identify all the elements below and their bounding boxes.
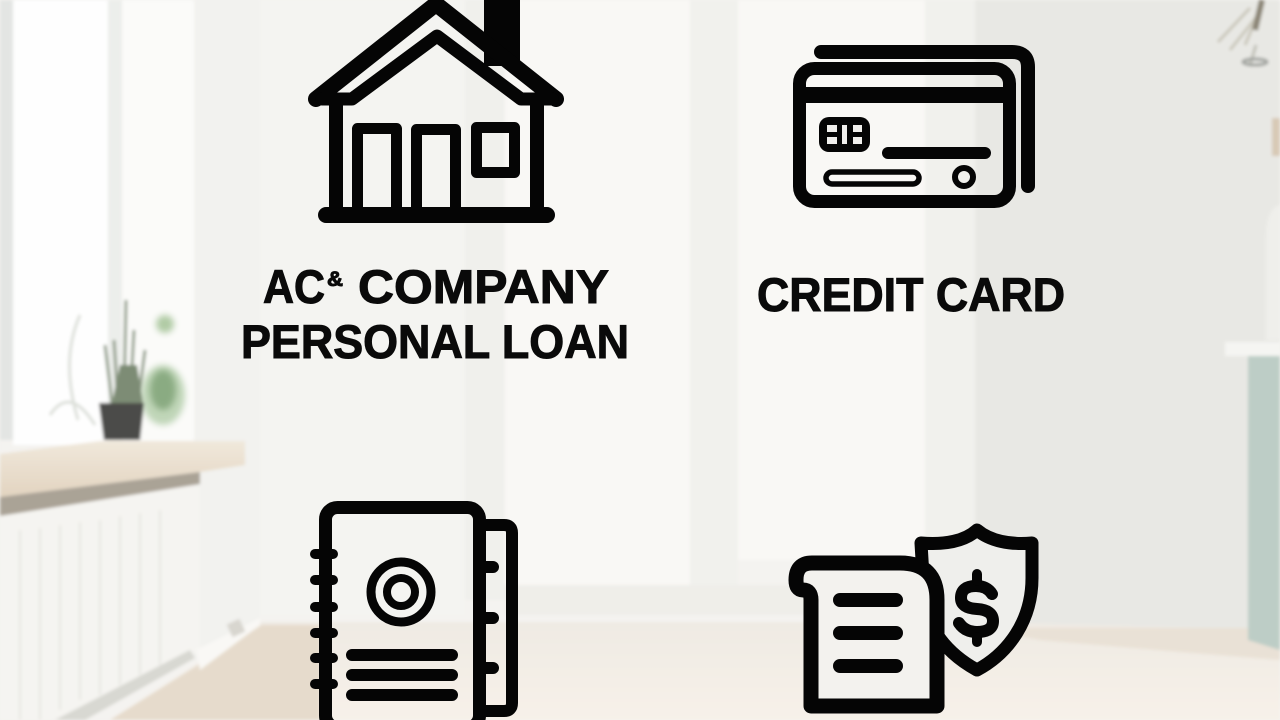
magnetic band <box>800 87 1009 103</box>
ground line <box>326 207 547 223</box>
skirting <box>196 618 260 670</box>
number line <box>888 147 985 159</box>
cover <box>326 508 480 720</box>
walls <box>336 100 537 214</box>
floor <box>110 622 1280 720</box>
heading line one: AC <box>263 260 325 313</box>
side tab panel <box>486 525 512 711</box>
icon: document with dollar shield <box>796 530 1032 706</box>
left floor band <box>110 625 320 720</box>
icon: house with chimney <box>316 0 556 215</box>
right door <box>416 130 456 214</box>
text lines <box>352 655 452 695</box>
window sill <box>0 441 245 497</box>
cabinet front <box>1248 356 1280 650</box>
dot <box>955 168 973 186</box>
plant pot <box>99 403 144 440</box>
socket <box>227 619 245 637</box>
heading: credit card: CREDIT CARD <box>757 268 1065 321</box>
picture edge <box>1272 118 1280 156</box>
sill shadow <box>0 472 200 516</box>
floor side band <box>975 628 1280 660</box>
icon: credit cards <box>800 52 1028 202</box>
left door <box>358 128 396 214</box>
target emblem <box>371 562 431 622</box>
document <box>796 563 937 706</box>
document lines <box>840 600 896 666</box>
heading line one <box>263 260 609 313</box>
icon: spiral notebook <box>315 508 512 720</box>
outer roof <box>316 4 556 99</box>
heading line one: COMPANY <box>358 260 609 313</box>
dollar sign <box>959 574 993 642</box>
binding rings <box>315 554 333 684</box>
heading line two: PERSONAL LOAN <box>241 315 629 368</box>
heading: company personal loan <box>241 260 629 368</box>
cabinet item <box>1266 205 1280 340</box>
cabinet worktop <box>1225 342 1280 356</box>
heading line one: & <box>327 268 343 291</box>
back card <box>821 52 1028 186</box>
inner roof <box>322 36 552 99</box>
window <box>476 128 514 172</box>
left window <box>0 0 260 660</box>
index tabs <box>486 567 493 668</box>
shield <box>921 530 1032 670</box>
name pill <box>826 172 919 184</box>
front card <box>800 68 1010 202</box>
radiator <box>0 486 200 720</box>
chimney <box>484 0 520 66</box>
plant foliage <box>50 300 185 425</box>
central doors <box>260 0 975 615</box>
radiator pipe <box>55 650 195 720</box>
chip <box>819 117 870 152</box>
dried flowers <box>1218 0 1267 65</box>
right wall <box>975 0 1280 630</box>
